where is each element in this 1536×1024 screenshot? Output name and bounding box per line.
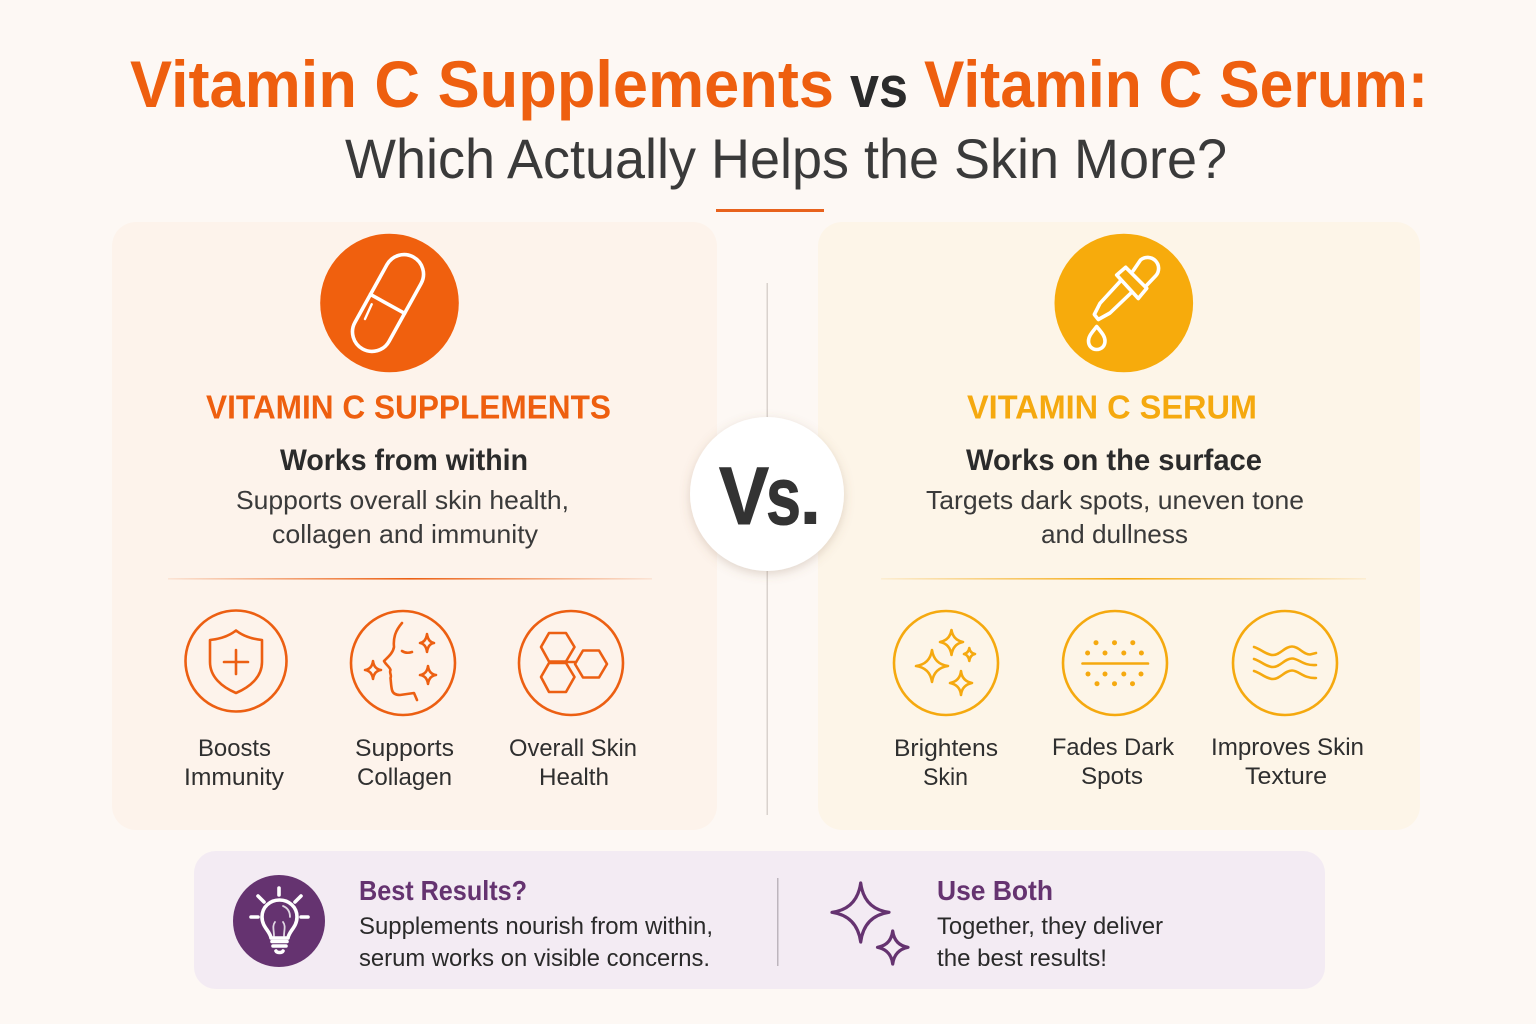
label — [894, 735, 998, 791]
icon: sparkles — [894, 611, 998, 715]
icon: shield with plus — [186, 610, 286, 712]
title: Vitamin C Supplements — [130, 47, 834, 121]
panel description: and dullness — [1041, 519, 1188, 549]
callout text: Supplements nourish from within, — [359, 913, 713, 940]
benefit: overall skin health — [509, 611, 637, 791]
callout: best results — [194, 851, 1325, 989]
icon: dots and line — [1063, 611, 1167, 715]
vs badge: s — [766, 451, 801, 542]
label: Fades Dark — [1052, 734, 1175, 761]
label: Brightens — [894, 735, 998, 762]
center divider line — [766, 283, 768, 815]
icon: face with sparkles — [351, 611, 455, 715]
title: Vitamin C Serum: — [924, 47, 1428, 121]
callout text — [937, 913, 1163, 972]
panel description: Supports overall skin health, — [236, 485, 569, 515]
label — [509, 735, 637, 791]
benefit: improves skin texture — [1211, 611, 1364, 790]
panel: vitamin C supplements — [112, 222, 717, 830]
benefit: boosts immunity — [184, 610, 286, 791]
panel description: collagen and immunity — [272, 519, 538, 549]
label: Immunity — [184, 764, 284, 791]
callout text: serum works on visible concerns. — [359, 945, 710, 972]
panel description: Targets dark spots, uneven tone — [926, 485, 1304, 515]
icon: light bulb — [233, 875, 325, 967]
label — [355, 735, 454, 791]
label: Spots — [1081, 763, 1143, 790]
panel description — [926, 485, 1304, 549]
callout text — [359, 913, 713, 972]
panel subheading: Works on the surface — [966, 444, 1262, 477]
panel: vitamin C serum — [818, 222, 1420, 830]
icon: hexagons — [519, 611, 623, 715]
callout heading: Best Results? — [359, 875, 527, 906]
icon: dropper — [1054, 234, 1193, 372]
title — [130, 47, 1428, 121]
benefit: supports collagen — [351, 611, 455, 791]
label — [1052, 734, 1175, 790]
callout text: the best results! — [937, 945, 1107, 972]
label: Improves Skin — [1211, 734, 1364, 761]
panel description — [236, 485, 569, 549]
label: Texture — [1245, 763, 1327, 790]
title: vs — [850, 55, 908, 120]
vs badge: . — [799, 451, 822, 542]
icon: waves — [1233, 611, 1337, 715]
benefit: brightens skin — [894, 611, 998, 791]
callout text: Together, they deliver — [937, 913, 1163, 940]
callout heading: Use Both — [937, 875, 1053, 906]
panel heading: VITAMIN C SUPPLEMENTS — [206, 388, 611, 426]
label: Overall Skin — [509, 735, 637, 762]
vs badge: V — [719, 451, 769, 542]
panel heading: VITAMIN C SERUM — [967, 388, 1257, 426]
label: Boosts — [198, 735, 271, 762]
vs badge — [690, 417, 844, 571]
label: Health — [539, 764, 609, 791]
label — [184, 735, 284, 791]
icon: purple sparkles — [832, 883, 908, 964]
label: Supports — [355, 735, 454, 762]
title underline — [716, 209, 824, 212]
label — [1211, 734, 1364, 790]
label: Collagen — [357, 764, 452, 791]
panel subheading: Works from within — [280, 444, 528, 477]
benefit: fades dark spots — [1052, 611, 1175, 790]
subtitle: Which Actually Helps the Skin More? — [345, 127, 1227, 190]
label: Skin — [923, 764, 968, 791]
icon: capsule — [320, 234, 459, 372]
